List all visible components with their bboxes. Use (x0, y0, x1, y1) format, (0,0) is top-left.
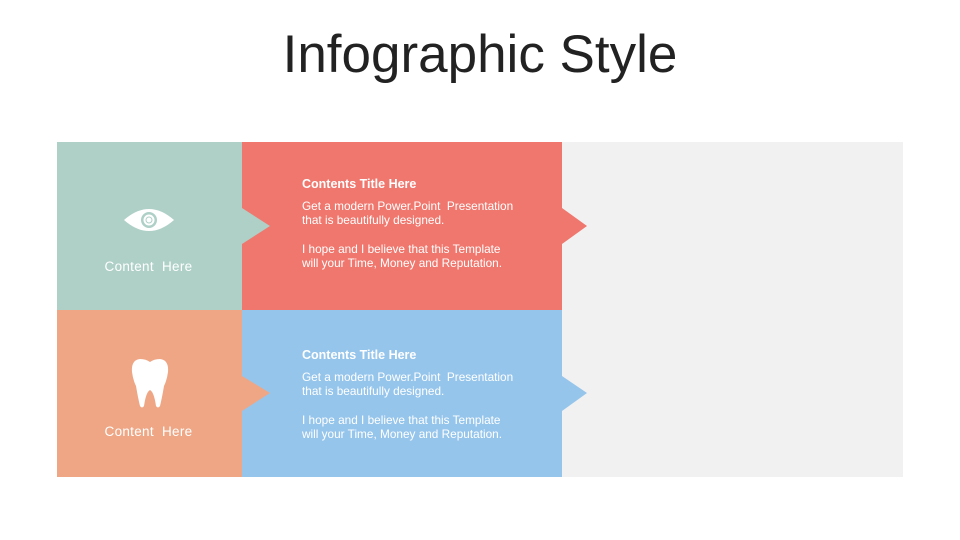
text block: blue: that is beautifully designed. (302, 384, 444, 398)
text block: red: that is beautifully designed. (302, 213, 444, 227)
text block: blue: Contents Title Here (302, 348, 416, 362)
text block: blue: I hope and I believe that this Template (302, 413, 500, 427)
panel: teal (57, 142, 242, 310)
arrow: blue (562, 376, 587, 411)
text block: red: Get a modern Power.Point Presentation (302, 199, 513, 213)
text block: red: will your Time, Money and Reputation. (302, 256, 502, 270)
text block: red (302, 177, 513, 270)
arrow: teal (242, 208, 270, 244)
panel: red (242, 142, 562, 310)
label: Content Here (105, 424, 192, 439)
text block: red: Contents Title Here (302, 177, 416, 191)
text block: red: I hope and I believe that this Template (302, 242, 500, 256)
icon: tooth (132, 359, 168, 408)
arrow: orange (242, 376, 270, 411)
panel: orange (57, 310, 242, 477)
label: Content Here (105, 259, 192, 274)
title: Infographic Style (283, 25, 677, 84)
text block: blue: Get a modern Power.Point Presentation (302, 370, 513, 384)
arrow: red (562, 208, 587, 244)
panel: gray background (562, 142, 903, 477)
text block: blue: will your Time, Money and Reputation. (302, 427, 502, 441)
panel: blue (242, 310, 562, 477)
text block: blue (302, 348, 513, 441)
icon: eye (124, 209, 174, 231)
